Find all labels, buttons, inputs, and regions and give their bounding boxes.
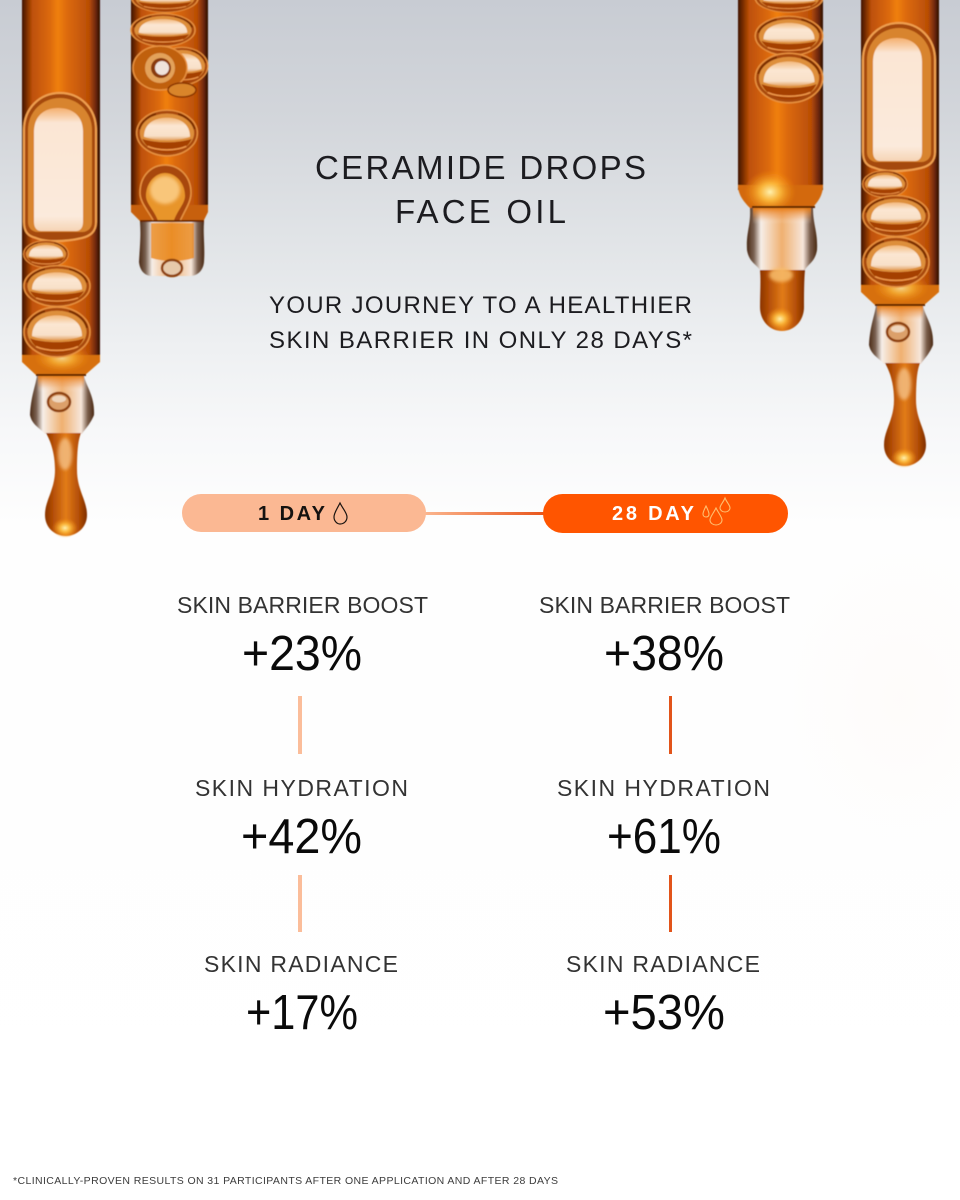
title	[315, 149, 646, 230]
stat: skin barrier boost 1 day: SKIN BARRIER BOOST	[177, 592, 428, 618]
icon: three drops	[703, 498, 730, 525]
subtitle	[269, 292, 692, 354]
timeline connector	[424, 512, 546, 515]
pill: 1 day: 1 DAY	[258, 503, 326, 525]
footnote: *CLINICALLY-PROVEN RESULTS ON 31 PARTICIPANTS AFTER ONE APPLICATION AND AFTER 28 DAYS	[13, 1175, 558, 1187]
subtitle: SKIN BARRIER IN ONLY 28 DAYS*	[269, 327, 692, 354]
stat: skin barrier boost 28 day: SKIN BARRIER BOOST	[539, 592, 790, 618]
stat: skin radiance 1 day: SKIN RADIANCE	[204, 951, 398, 977]
column: 28 day results	[539, 592, 790, 1040]
pill: 28 day: 28 DAY	[612, 503, 695, 525]
stat: skin radiance 28 day	[566, 951, 760, 1040]
stat: skin barrier boost 1 day	[177, 592, 428, 681]
stat: skin hydration 1 day: +42%	[241, 810, 362, 864]
icon: single drop	[334, 503, 347, 524]
stat: skin hydration 28 day: +61%	[607, 810, 721, 864]
column: 1 day results	[177, 592, 428, 1040]
stat: skin barrier boost 28 day	[539, 592, 790, 681]
stat: skin radiance 28 day: SKIN RADIANCE	[566, 951, 760, 977]
stat: skin barrier boost 28 day: +38%	[604, 627, 724, 681]
stat: skin radiance 28 day: +53%	[603, 986, 725, 1040]
stat: skin barrier boost 1 day: +23%	[242, 627, 362, 681]
stat: skin hydration 28 day	[557, 775, 770, 864]
stat: skin radiance 1 day: +17%	[246, 986, 358, 1040]
pill: 1 day	[182, 494, 426, 532]
subtitle: YOUR JOURNEY TO A HEALTHIER	[269, 292, 692, 319]
stat: skin hydration 1 day	[195, 775, 408, 864]
stat: skin hydration 28 day: SKIN HYDRATION	[557, 775, 770, 801]
pipette: second from left	[131, 0, 208, 276]
pill: 28 day	[543, 494, 788, 533]
stat: skin hydration 1 day: SKIN HYDRATION	[195, 775, 408, 801]
pipette: second from right	[738, 0, 823, 331]
title: CERAMIDE DROPS	[315, 149, 646, 186]
pipette: far left	[22, 0, 100, 538]
title: FACE OIL	[395, 193, 566, 230]
pipette: far right	[861, 0, 939, 468]
stat: skin radiance 1 day	[204, 951, 398, 1040]
